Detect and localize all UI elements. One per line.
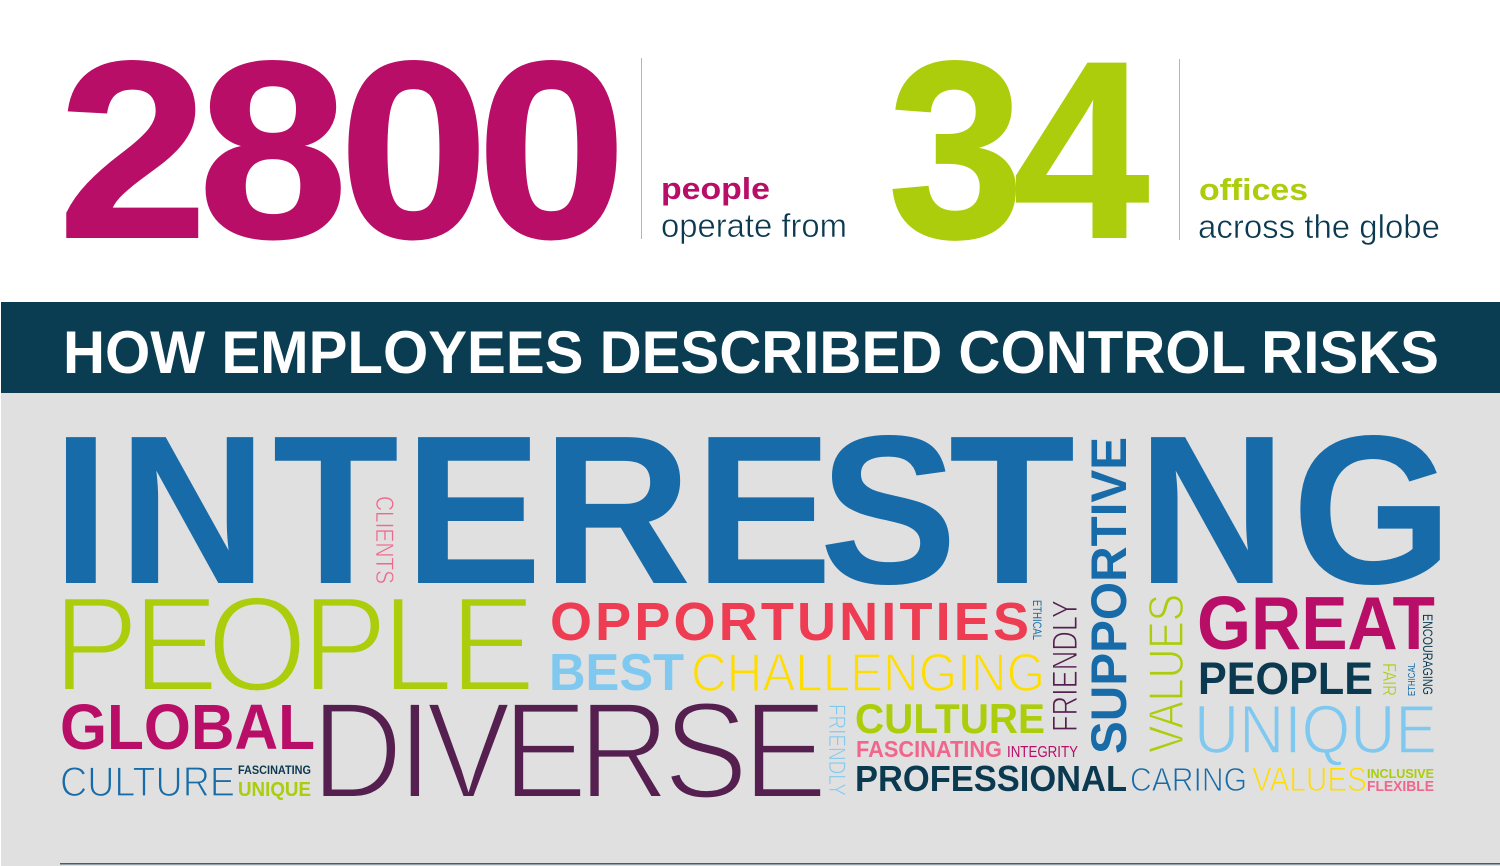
word: UNIQUE: UNIQUE — [1194, 691, 1437, 768]
stat: 34 offices — [888, 9, 1440, 291]
vertical word: FAIR: FAIR — [1379, 663, 1399, 696]
word: VALUES yellow: VALUES — [1252, 761, 1367, 799]
word: CARING: CARING — [1130, 761, 1247, 798]
word: FLEXIBLE: FLEXIBLE — [1367, 778, 1434, 795]
text: people operate from — [661, 171, 847, 244]
vertical word: ETHICAL small: ETHICAL — [1407, 663, 1418, 696]
word: INCLUSIVE: INCLUSIVE — [1367, 766, 1434, 781]
word: INTEREST: INTEREST — [52, 392, 1075, 629]
word: CHALLENGING: CHALLENGING — [691, 643, 1045, 703]
label: people: people — [661, 171, 770, 206]
word: PROFESSIONAL: PROFESSIONAL — [855, 758, 1127, 799]
vertical word: SUPPORTIVE: SUPPORTIVE — [1081, 437, 1137, 754]
label: offices: offices — [1199, 172, 1308, 207]
word: PEOPLE dark: PEOPLE — [1198, 653, 1373, 704]
number 2800: 2800 — [58, 10, 627, 291]
word: NG: NG — [1137, 392, 1453, 629]
word: BEST: BEST — [549, 644, 684, 702]
panel: word cloud — [1, 392, 1500, 866]
label: operate from: operate from — [661, 207, 847, 244]
word: CULTURE blue: CULTURE — [60, 758, 235, 805]
text: offices across the globe — [1198, 172, 1440, 245]
word: FASCINATING dark: FASCINATING — [238, 765, 311, 777]
panel: headline statistics — [58, 9, 1440, 291]
vertical word: FRIENDLY purple: FRIENDLY — [1046, 600, 1085, 732]
number 34: 34 — [888, 9, 1149, 291]
word: INTEGRITY: INTEGRITY — [1007, 744, 1078, 761]
word: PEOPLE: PEOPLE — [53, 569, 536, 721]
word: GLOBAL: GLOBAL — [60, 691, 315, 763]
label: across the globe: across the globe — [1198, 208, 1440, 245]
vertical word: VALUES green: VALUES — [1140, 594, 1194, 753]
vertical word: FRIENDLY blue: FRIENDLY — [823, 704, 850, 796]
panel: heading banner — [1, 302, 1500, 394]
vertical word: CLIENTS: CLIENTS — [370, 496, 398, 584]
word: DIVERSE: DIVERSE — [311, 674, 827, 828]
word: UNIQUE green: UNIQUE — [238, 779, 311, 801]
vertical word: ENCOURAGING: ENCOURAGING — [1420, 614, 1436, 695]
word: OPPORTUNITIES: OPPORTUNITIES — [550, 592, 1029, 652]
word: FASCINATING pink: FASCINATING — [856, 736, 1002, 762]
word: CULTURE green: CULTURE — [855, 695, 1045, 742]
word: GREAT: GREAT — [1197, 581, 1435, 665]
heading: HOW EMPLOYEES DESCRIBED CONTROL RISKS — [63, 319, 1439, 386]
stat: 2800 people — [58, 10, 847, 291]
vertical word: ETHICAL: ETHICAL — [1030, 600, 1044, 640]
